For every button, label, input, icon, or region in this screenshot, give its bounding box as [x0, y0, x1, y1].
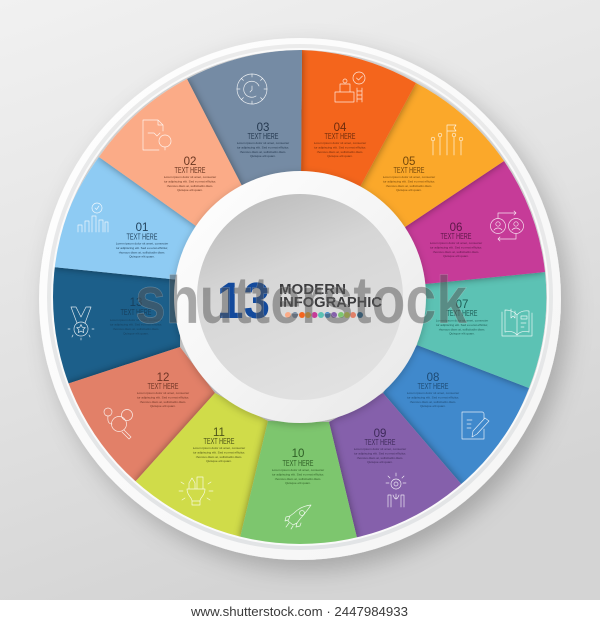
label 09: 09 — [374, 428, 386, 440]
label 05: Lorem ipsum dolor sit amet, consecter — [383, 175, 435, 179]
label 12: rhoncus diam at, sollicitudin diam. — [140, 400, 186, 404]
segment 12 — [67, 347, 215, 482]
segment 05 — [360, 83, 504, 227]
label 04: tur adipiscing elit. Sed eu erat efficitur, — [314, 146, 366, 150]
label 06: rhoncus diam at, sollicitudin diam. — [433, 250, 479, 254]
label 03: TEXT HERE — [248, 132, 278, 141]
label 06: Quisque elit quam. — [443, 254, 469, 258]
segment 11 — [135, 393, 268, 538]
segment 04 — [301, 50, 416, 187]
watermark: shutterstock — [135, 263, 468, 338]
label 07: TEXT HERE — [446, 309, 478, 318]
label 01: Quisque elit quam. — [129, 254, 155, 258]
label 13: Lorem ipsum dolor sit amet, consecter — [110, 318, 162, 322]
label 13 — [110, 297, 162, 336]
segment 01 — [53, 157, 196, 280]
label 08: tur adipiscing elit. Sed eu erat efficitur, — [407, 396, 459, 400]
label 12: TEXT HERE — [148, 382, 178, 391]
label 10: rhoncus diam at, sollicitudin diam. — [275, 477, 321, 481]
outer white ring — [39, 38, 561, 560]
segment 06 — [405, 161, 545, 284]
icon: bars with check — [78, 203, 108, 232]
big number 13: 13 — [217, 272, 270, 329]
icon: desk, ladder and check — [335, 72, 365, 102]
label 13: tur adipiscing elit. Sed eu erat efficitur, — [110, 322, 162, 326]
label 09 — [354, 428, 406, 464]
label 03: tur adipiscing elit. Sed eu erat efficitur, — [237, 146, 289, 150]
label 05 — [383, 156, 435, 192]
segment 02 — [99, 79, 242, 226]
label 01: rhoncus diam at, sollicitudin diam. — [119, 250, 165, 254]
label 07: Quisque elit quam. — [449, 332, 475, 336]
label 03: Quisque elit quam. — [250, 154, 276, 158]
inner white ring — [174, 171, 426, 423]
label 08: Lorem ipsum dolor sit amet, consecter — [407, 391, 459, 395]
label 11: rhoncus diam at, sollicitudin diam. — [196, 455, 242, 459]
segment 07 — [417, 272, 546, 388]
label 08: Quisque elit quam. — [420, 404, 446, 408]
segment 03 — [187, 50, 302, 186]
segment 10 — [240, 421, 357, 545]
label 07: 07 — [456, 299, 468, 311]
label 10: Lorem ipsum dolor sit amet, consecter — [272, 468, 324, 472]
icon: target person — [386, 473, 406, 507]
label 01: 01 — [136, 222, 148, 234]
label 04 — [314, 122, 366, 158]
label 04: TEXT HERE — [324, 132, 356, 141]
icon: flags and pins — [431, 125, 463, 155]
label 11: Quisque elit quam. — [206, 459, 232, 463]
label 06 — [430, 222, 482, 258]
label 04: 04 — [334, 122, 347, 134]
label 07: tur adipiscing elit. Sed eu erat efficitur, — [436, 323, 488, 327]
label 06: TEXT HERE — [440, 232, 472, 241]
centre title — [217, 272, 383, 329]
label 04: rhoncus diam at, sollicitudin diam. — [317, 150, 363, 154]
wheel of 13 segments — [51, 50, 546, 545]
segment 13 — [51, 267, 180, 384]
label 01 — [116, 222, 168, 258]
icon: bulb with tools — [179, 477, 213, 505]
icon: stopwatch dial — [237, 74, 267, 104]
footer credit: www.shutterstock.com · 2447984933 — [190, 604, 408, 619]
heading: MODERN — [279, 282, 346, 298]
label 10: tur adipiscing elit. Sed eu erat efficitur, — [272, 472, 324, 476]
icon: rocket — [285, 505, 311, 529]
label 12: tur adipiscing elit. Sed eu erat efficitur, — [137, 396, 189, 400]
label 13: 13 — [130, 297, 142, 309]
label 13: Quisque elit quam. — [123, 332, 149, 336]
label 05: Quisque elit quam. — [396, 188, 422, 192]
label 01: tur adipiscing elit. Sed eu erat efficitur, — [116, 246, 168, 250]
label 02: rhoncus diam at, sollicitudin diam. — [167, 184, 213, 188]
label 08 — [407, 372, 459, 408]
label 09: Lorem ipsum dolor sit amet, consecter — [354, 447, 406, 451]
label 08: rhoncus diam at, sollicitudin diam. — [410, 400, 456, 404]
segment 09 — [329, 393, 462, 538]
label 13: TEXT HERE — [120, 308, 152, 317]
label 09: TEXT HERE — [364, 438, 396, 447]
label 10: Quisque elit quam. — [285, 481, 311, 485]
label 11 — [193, 427, 245, 463]
label 05: TEXT HERE — [394, 166, 424, 175]
label 02 — [164, 156, 216, 192]
label 11: TEXT HERE — [204, 437, 234, 446]
label 09: rhoncus diam at, sollicitudin diam. — [357, 456, 403, 460]
label 04: Quisque elit quam. — [327, 154, 353, 158]
inner grey hole — [197, 194, 403, 400]
label 04: Lorem ipsum dolor sit amet, consecter — [314, 141, 366, 145]
label 02: 02 — [184, 156, 196, 168]
label 01: TEXT HERE — [126, 232, 158, 242]
label 11: 11 — [213, 427, 225, 439]
label 07 — [436, 299, 488, 336]
label 05: 05 — [403, 156, 415, 168]
icon: magnifier with clock — [104, 408, 132, 439]
label 09: tur adipiscing elit. Sed eu erat efficitur, — [354, 452, 406, 456]
label 07: Lorem ipsum dolor sit amet, consecter — [436, 318, 488, 322]
label 03: 03 — [257, 122, 269, 134]
label 08: 08 — [427, 372, 439, 384]
label 11: Lorem ipsum dolor sit amet, consecter — [193, 446, 245, 450]
icon: notepad and pen — [462, 412, 489, 439]
label 10 — [272, 448, 324, 485]
label 10: 10 — [292, 448, 304, 460]
label 09: Quisque elit quam. — [367, 460, 393, 464]
label 12: Lorem ipsum dolor sit amet, consecter — [137, 391, 189, 395]
label 02: tur adipiscing elit. Sed eu erat efficitur, — [164, 180, 216, 184]
label 08: TEXT HERE — [418, 382, 448, 391]
label 07: rhoncus diam at, sollicitudin diam. — [439, 328, 485, 332]
label 02: TEXT HERE — [174, 166, 206, 175]
label 12: 12 — [157, 372, 169, 384]
colour dots — [285, 312, 363, 318]
label 12: Quisque elit quam. — [150, 404, 176, 408]
icon: medal — [68, 307, 94, 340]
label 03: rhoncus diam at, sollicitudin diam. — [240, 150, 286, 154]
footer strip — [0, 600, 600, 620]
label 05: tur adipiscing elit. Sed eu erat efficitur, — [383, 180, 435, 184]
label 02: Quisque elit quam. — [177, 188, 203, 192]
label 11: tur adipiscing elit. Sed eu erat efficitur, — [193, 450, 245, 454]
label 05: rhoncus diam at, sollicitudin diam. — [386, 184, 432, 188]
label 03 — [237, 122, 289, 158]
segment 08 — [383, 345, 529, 485]
label 13: rhoncus diam at, sollicitudin diam. — [113, 327, 159, 331]
icon: open book — [502, 309, 532, 336]
label 01: Lorem ipsum dolor sit amet, consecter — [116, 242, 168, 246]
centre title: INFOGRAPHIC — [279, 295, 383, 311]
label 03: Lorem ipsum dolor sit amet, consecter — [237, 141, 289, 145]
label 12 — [137, 372, 189, 408]
label 06: Lorem ipsum dolor sit amet, consecter — [430, 241, 482, 245]
label 02: Lorem ipsum dolor sit amet, consecter — [164, 175, 216, 179]
label 10: TEXT HERE — [282, 459, 314, 468]
label 06: tur adipiscing elit. Sed eu erat efficitur, — [430, 246, 482, 250]
icon: two people exchange — [490, 211, 524, 241]
icon: document with puzzle — [143, 120, 171, 150]
label 06: 06 — [450, 222, 462, 234]
